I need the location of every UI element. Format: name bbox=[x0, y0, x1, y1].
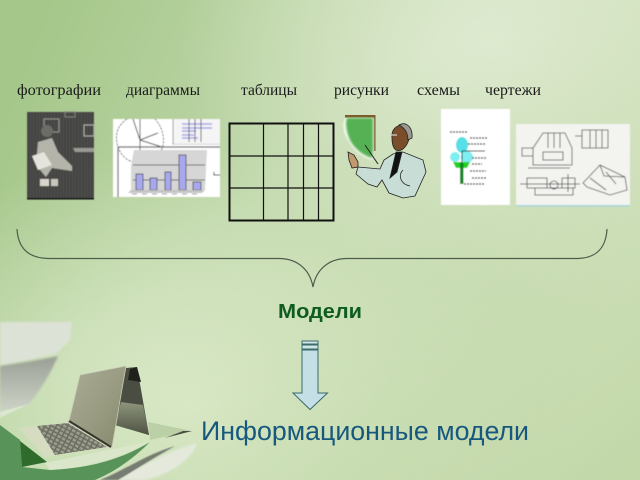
image: plant diagram bbox=[441, 109, 510, 205]
pie chart bbox=[116, 119, 164, 163]
brush shadow bbox=[100, 443, 197, 480]
category labels bbox=[17, 82, 541, 99]
green swoosh bbox=[0, 425, 150, 480]
image: old photograph bbox=[27, 112, 94, 200]
category labels: схемы bbox=[417, 82, 461, 99]
image: technical drawings bbox=[516, 124, 630, 206]
category labels: диаграммы bbox=[126, 82, 201, 99]
heading: models: Модели bbox=[278, 301, 362, 323]
image: charts collage bbox=[113, 119, 220, 197]
category labels: фотографии bbox=[17, 82, 101, 99]
soft brush haze, upper left bbox=[0, 322, 72, 411]
horizontal bar chart bbox=[173, 119, 220, 144]
category labels: рисунки bbox=[334, 82, 389, 99]
column chart bbox=[128, 150, 207, 194]
table grid bbox=[230, 124, 334, 220]
image: teacher at board bbox=[343, 115, 426, 198]
front laptop base bbox=[19, 422, 112, 457]
laptop hinge bbox=[69, 421, 111, 447]
image: laptop decoration bbox=[0, 322, 197, 480]
teacher bbox=[348, 124, 426, 198]
board bbox=[343, 115, 376, 160]
curly brace bbox=[17, 229, 607, 287]
front laptop screen bbox=[69, 366, 126, 447]
arrow bbox=[293, 341, 328, 410]
category labels: чертежи bbox=[485, 82, 541, 99]
category labels: таблицы bbox=[241, 82, 298, 99]
subtitle: information models: Информационные модели bbox=[201, 416, 529, 446]
rear laptop bbox=[115, 367, 192, 440]
light floor bbox=[0, 404, 30, 418]
